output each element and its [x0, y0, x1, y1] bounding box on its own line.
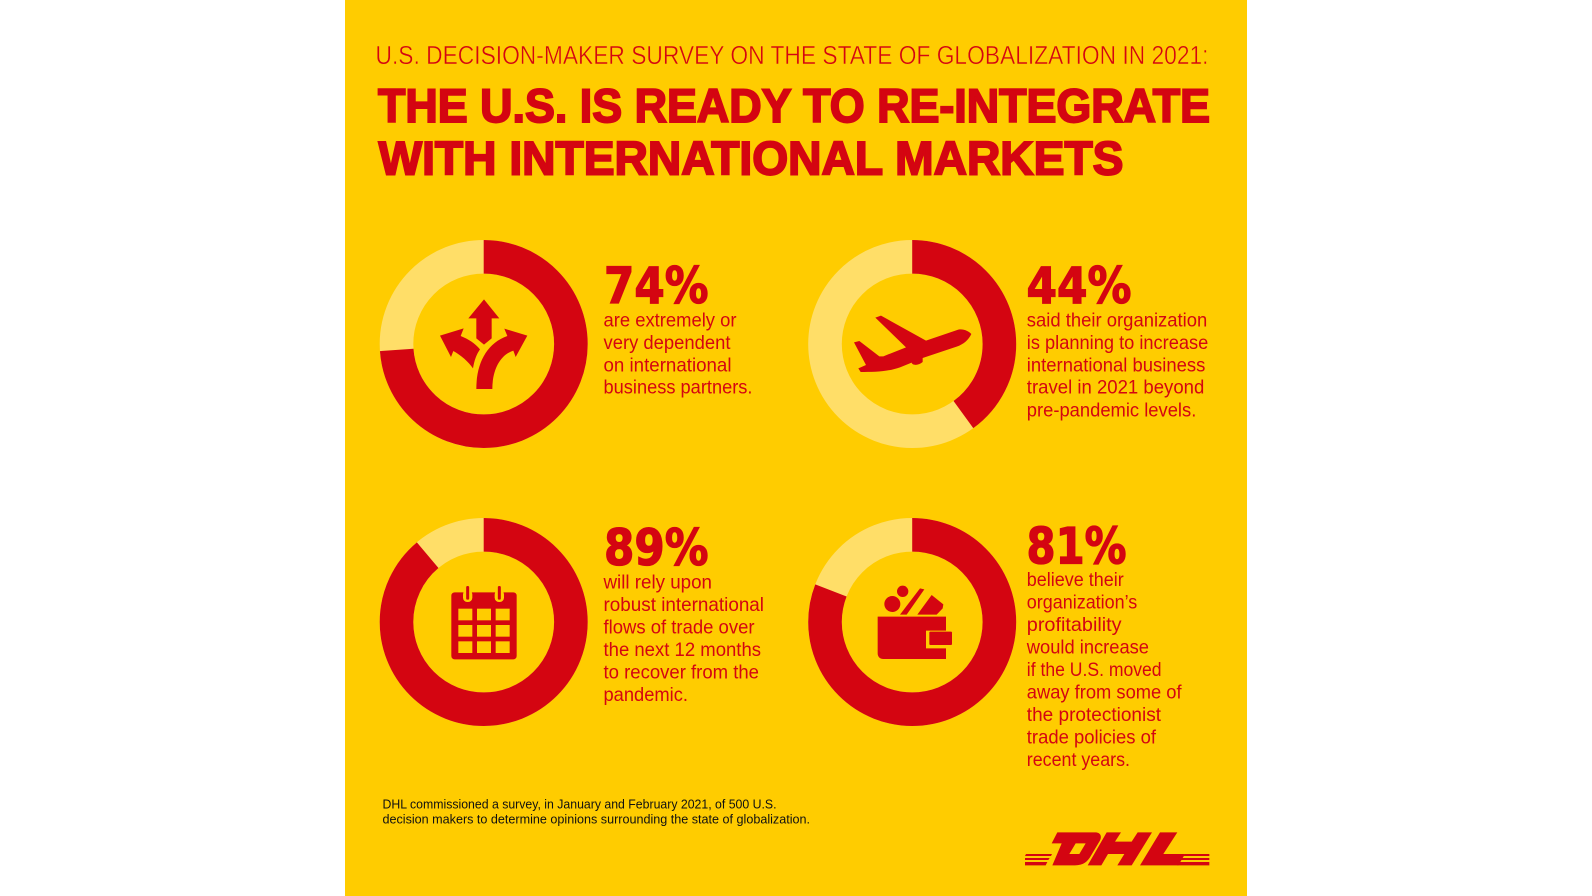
icon: wallet with percent: [878, 586, 952, 659]
title: [378, 79, 1210, 184]
description: 81%: profitability: [1027, 614, 1122, 636]
description: 44%: travel in 2021 beyond: [1027, 377, 1204, 399]
percentage: 81%: 81%: [1026, 518, 1126, 576]
footnote: decision makers to determine opinions surrounding the state of globalization.: [382, 812, 810, 826]
panel: yellow background: [345, 0, 1247, 896]
description: 81%: away from some of: [1027, 681, 1182, 703]
panel: 81% stat: [825, 518, 1182, 771]
description: 81%: would increase: [1026, 636, 1149, 658]
description: 89%: will rely upon: [603, 572, 712, 594]
description: 81%: recent years.: [1027, 749, 1130, 771]
footnote: DHL commissioned a survey, in January and February 2021, of 500 U.S.: [382, 797, 776, 811]
description: 44%: said their organization: [1027, 309, 1207, 331]
donut chart: 74%: [396, 257, 571, 431]
description: 81%: the protectionist: [1027, 704, 1162, 726]
donut chart: 81%: [825, 535, 999, 709]
donut chart: 89%: [396, 535, 571, 709]
panel: 74% stat: [396, 257, 752, 431]
description: 89%: robust international: [604, 594, 764, 616]
logo: DHL: [1025, 832, 1209, 865]
description: 81%: organization’s: [1027, 591, 1138, 613]
description: 44%: is planning to increase: [1027, 332, 1208, 354]
panel: 44% stat: [825, 257, 1208, 431]
description: 74%: business partners.: [604, 377, 752, 399]
description: 89%: pandemic.: [604, 684, 688, 706]
title: WITH INTERNATIONAL MARKETS: [378, 132, 1124, 184]
description: 44%: [1027, 309, 1208, 421]
percentage: 44%: 44%: [1026, 257, 1132, 315]
description: 44%: international business: [1027, 354, 1206, 376]
icon: airplane: [854, 316, 971, 372]
description: 81%: [1026, 569, 1182, 771]
icon: calendar: [451, 586, 517, 659]
description: 89%: to recover from the: [604, 662, 759, 684]
description: 89%: [603, 572, 764, 706]
description: 89%: flows of trade over: [604, 616, 755, 638]
description: 44%: pre-pandemic levels.: [1027, 399, 1196, 421]
subtitle: U.S. DECISION-MAKER SURVEY ON THE STATE OF GLOBALIZATION IN 2021:: [376, 42, 1208, 70]
description: 81%: if the U.S. moved: [1027, 659, 1162, 681]
description: 81%: trade policies of: [1027, 726, 1157, 748]
title: THE U.S. IS READY TO RE-INTEGRATE: [378, 79, 1210, 132]
description: 74%: [604, 309, 752, 399]
description: 74%: very dependent: [604, 332, 731, 354]
percentage: 74%: 74%: [604, 257, 708, 315]
percentage: 89%: 89%: [604, 519, 708, 577]
donut chart: 44%: [825, 257, 999, 431]
description: 89%: the next 12 months: [604, 639, 761, 661]
description: 74%: on international: [604, 354, 732, 376]
icon: diverging arrows: [440, 299, 527, 389]
footnote: [382, 797, 810, 826]
panel: 89% stat: [396, 519, 764, 709]
description: 81%: believe their: [1027, 569, 1124, 591]
description: 74%: are extremely or: [604, 309, 737, 331]
